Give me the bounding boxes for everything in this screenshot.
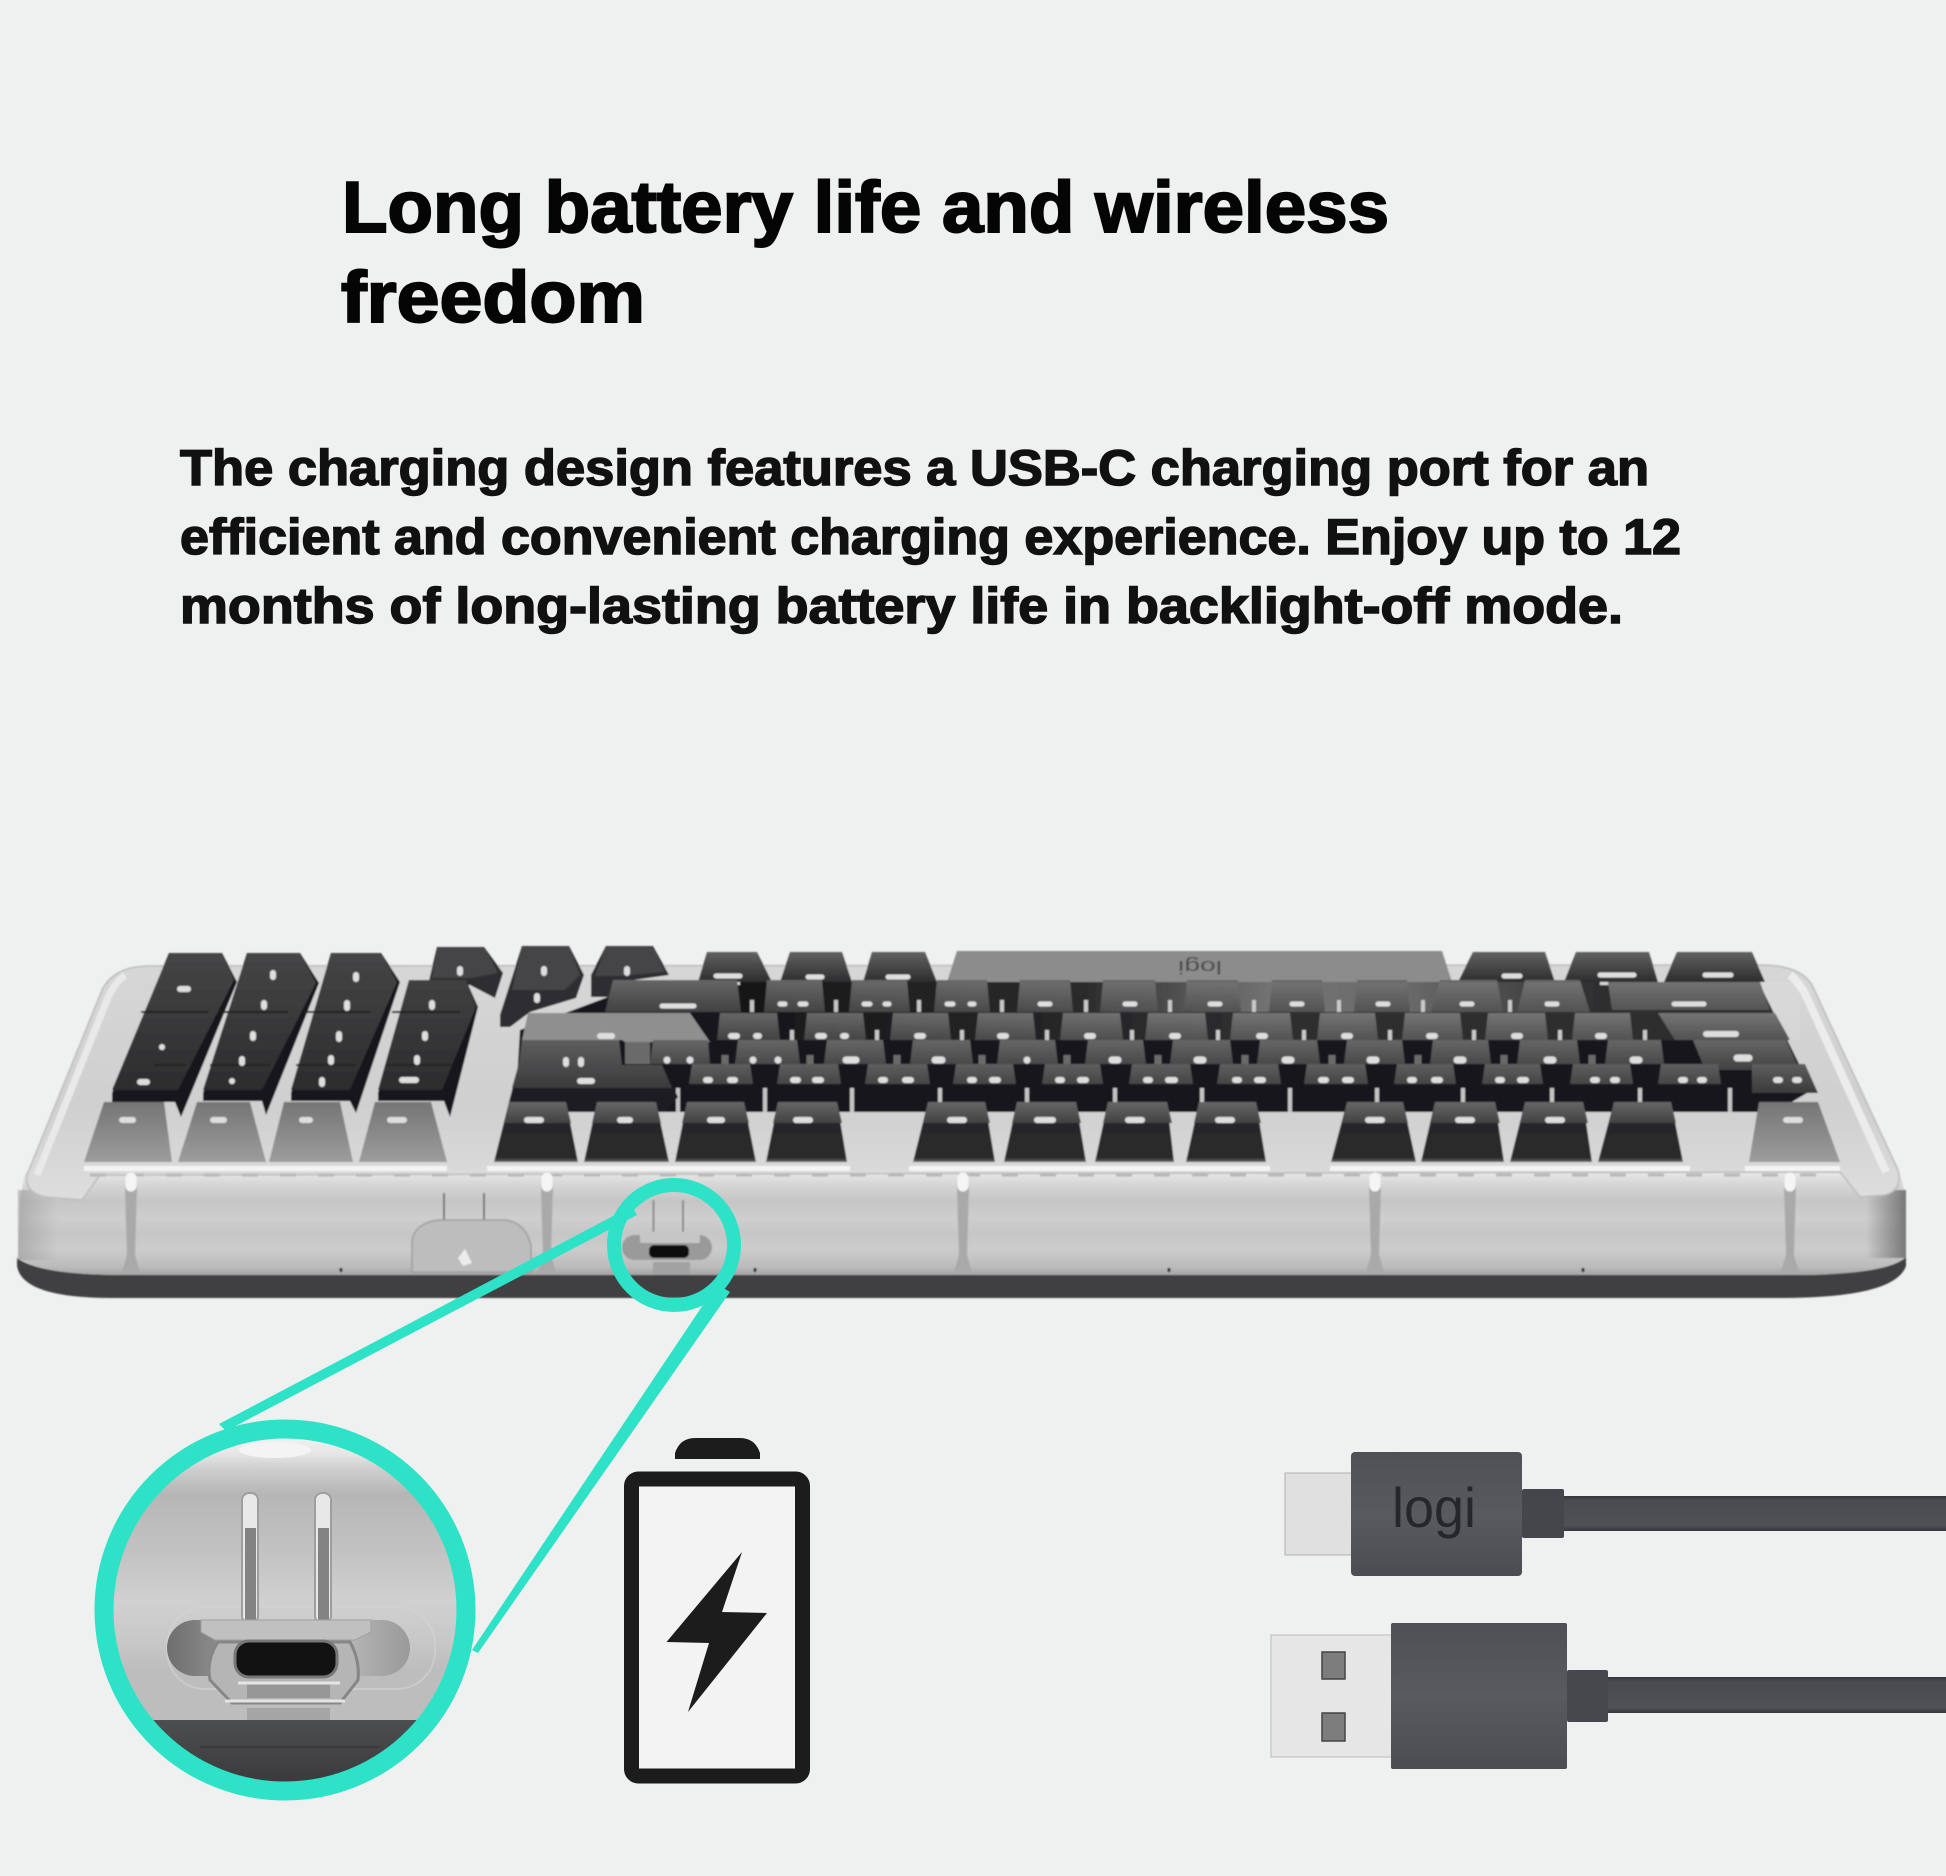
USB-C opening: [235, 1641, 337, 1677]
space key with upside-down logo: logi: [1178, 957, 1222, 977]
keyboard: [17, 946, 1906, 1298]
icon: battery charging: [632, 1438, 802, 1776]
lens background: [110, 1437, 460, 1720]
title: [341, 168, 1389, 338]
magnified USB-C port lens: [104, 1429, 466, 1791]
USB-C housing: [1351, 1452, 1522, 1576]
metal frame: [209, 1642, 358, 1720]
prongs: [242, 1493, 331, 1623]
title: freedom: [341, 258, 645, 338]
lighter tone on far rows: [760, 982, 1800, 1040]
lens top glare: [239, 1446, 311, 1458]
description text: The charging design features a USB-C charging port for an: [180, 440, 1649, 496]
case posts: [122, 1178, 1799, 1272]
keyboard top plate: [27, 965, 1899, 1200]
battery cap: [675, 1438, 760, 1459]
key row 2: [689, 1064, 1818, 1093]
number and function key columns: [112, 953, 478, 1117]
key well: [515, 985, 1812, 1112]
key row 5: [605, 980, 1770, 1012]
small zoom ring: [614, 1185, 734, 1305]
lightning bolt: [666, 1552, 767, 1712]
USB-A cable: [1271, 1623, 1946, 1769]
USB-A holes: [1322, 1652, 1345, 1741]
USB-A metal tip: [1271, 1635, 1392, 1757]
space key with upside-down logo: [947, 951, 1452, 982]
USB-C collar: [1522, 1489, 1564, 1538]
description text: efficient and convenient charging experience. Enjoy up to 12: [180, 509, 1681, 565]
USB-C metal tip: [1285, 1473, 1352, 1555]
white front ledge: [84, 1166, 1840, 1171]
description text: months of long-lasting battery life in backlight-off mode.: [180, 578, 1623, 634]
key legends: [122, 969, 1800, 1120]
keyboard front wall: [18, 1172, 1906, 1275]
logi logo: logi: [1392, 1476, 1476, 1539]
title: Long battery life and wireless: [342, 168, 1389, 248]
zoom callout lines: [219, 1206, 730, 1653]
lens dark base: [154, 1720, 416, 1782]
USB-A cable line: [1600, 1677, 1946, 1713]
front row gray keys: [84, 1102, 1840, 1162]
enter-shaped wide key: [509, 1040, 678, 1112]
gap slivers between keys: [678, 1000, 1730, 1112]
top row keys: [428, 946, 1765, 1027]
mode switch: [412, 1193, 531, 1272]
top bar: [201, 1620, 371, 1640]
key row 3: [625, 1042, 650, 1064]
keyboard base: [17, 1256, 1906, 1298]
USB-A housing: [1391, 1623, 1567, 1769]
description text: [180, 440, 1681, 634]
gray wide key: [522, 1013, 710, 1042]
big lens ring: [104, 1429, 466, 1791]
key row 4: [717, 1013, 1790, 1040]
battery body: [632, 1479, 802, 1776]
small USB-C port on keyboard: [622, 1200, 712, 1275]
front row dark keys: [494, 1102, 1683, 1162]
USB-C cable line: [1560, 1496, 1946, 1531]
USB-C cable: [1285, 1452, 1946, 1576]
capsule opening: [166, 1620, 436, 1690]
USB-A collar: [1567, 1670, 1608, 1722]
